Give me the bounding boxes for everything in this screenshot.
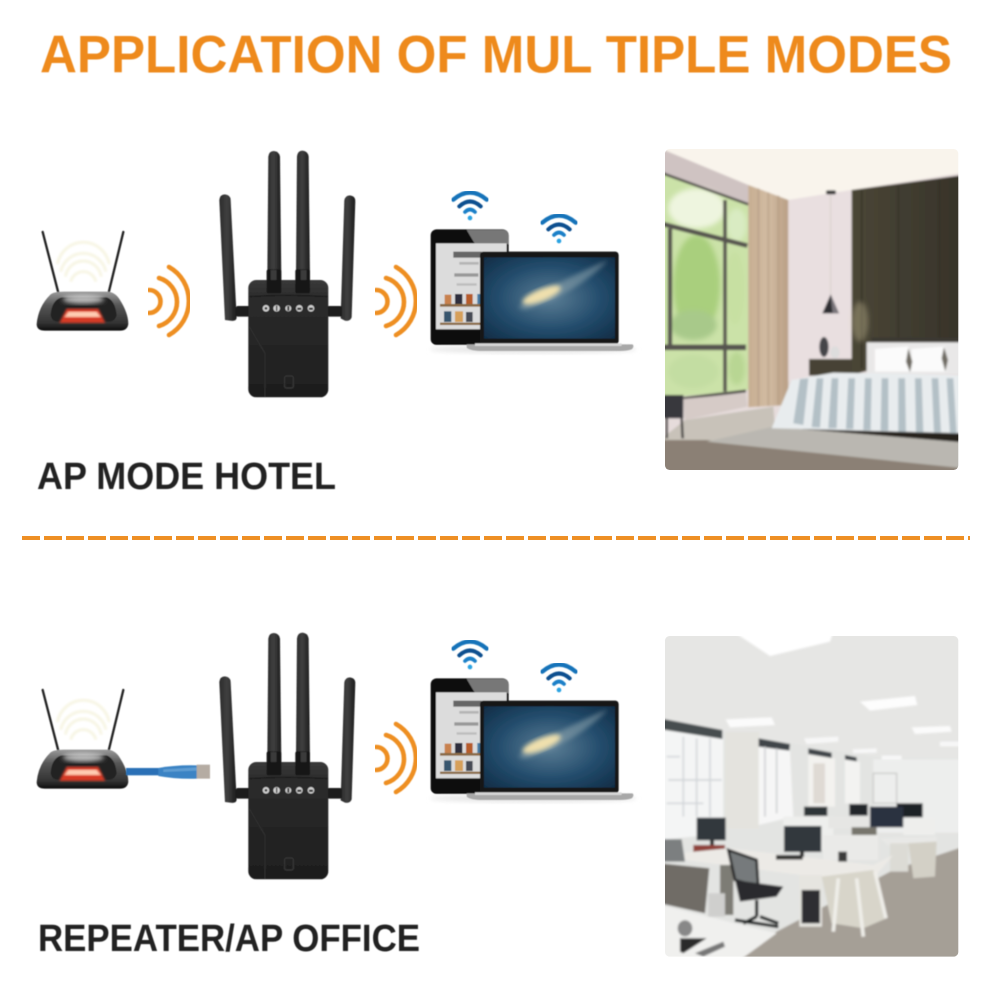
icon: tablet and laptop xyxy=(430,229,637,353)
icon: blue ethernet cable xyxy=(126,765,210,779)
icon: wifi symbol over tablet xyxy=(453,642,487,669)
panel: repeater/AP office xyxy=(37,630,967,960)
icon: router with ethernet cable xyxy=(37,690,210,789)
orange dashed divider xyxy=(22,536,970,540)
icon: signal waves from repeater xyxy=(376,724,416,792)
icon: home router xyxy=(37,690,128,789)
icon: wifi symbol over laptop xyxy=(542,216,576,243)
icon: wifi symbol over tablet xyxy=(453,193,487,220)
icon: wifi symbol over laptop xyxy=(542,665,576,692)
label: AP mode hotel: AP MODE HOTEL xyxy=(37,456,336,498)
title: APPLICATION OF MUL TIPLE MODES xyxy=(40,26,952,84)
icon: four-antenna wifi repeater xyxy=(219,151,355,397)
icon: signal waves from router xyxy=(149,267,189,335)
label: repeater/AP office: REPEATER/AP OFFICE xyxy=(38,918,420,960)
panel: AP mode hotel xyxy=(37,145,967,498)
icon: signal waves from repeater xyxy=(376,267,416,335)
photo: open-plan office xyxy=(660,630,967,960)
icon: tablet and laptop xyxy=(430,678,637,802)
icon: home router xyxy=(37,232,128,331)
photo: hotel bedroom xyxy=(660,145,967,475)
icon: four-antenna wifi repeater xyxy=(219,633,355,879)
